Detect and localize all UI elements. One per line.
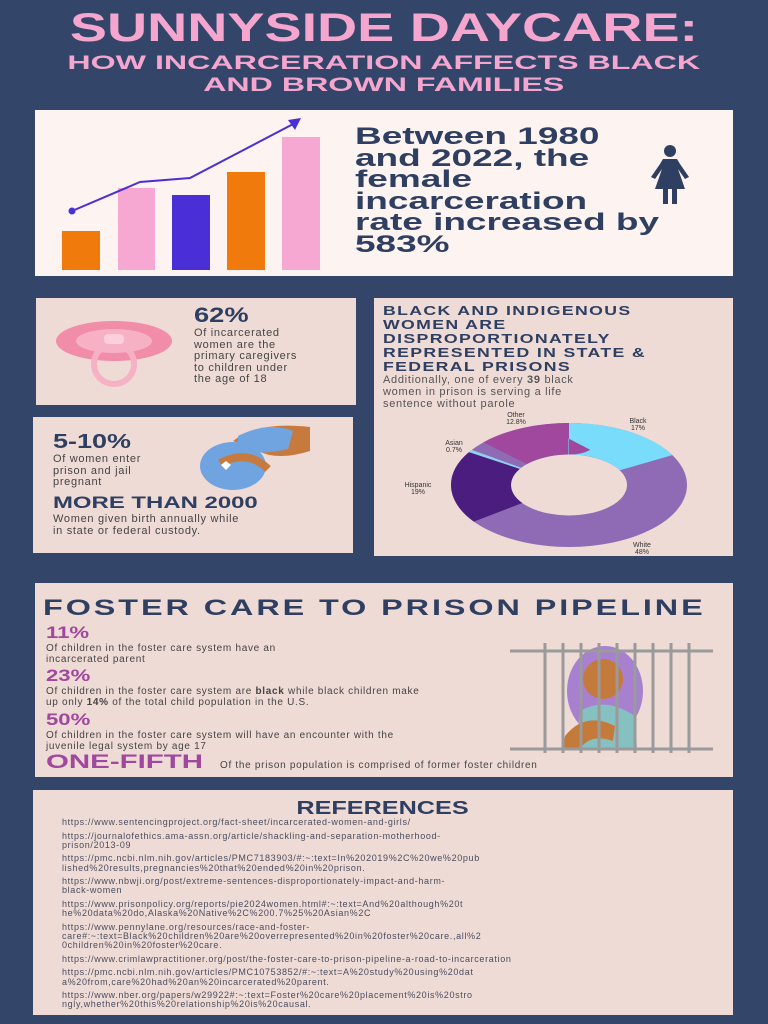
panel: race donut [374, 298, 733, 556]
stat 50% [46, 710, 394, 752]
subtext [383, 374, 574, 410]
reference list: ngly,whether%20this%20relationship%20is%20causal. [62, 999, 311, 1009]
reference list: https://www.prisonpolicy.org/reports/pie2024women.html#:~:text=And%20although%20t [62, 899, 463, 909]
subtitle: AND BROWN FAMILIES [203, 74, 565, 96]
stat 50%: juvenile legal system by age 17 [46, 741, 207, 752]
icon: pacifier [56, 321, 172, 387]
heading: FEDERAL PRISONS [383, 359, 571, 374]
stat 11%: 11% [46, 623, 89, 642]
heading: REPRESENTED IN STATE & [383, 345, 646, 360]
stat one-fifth [46, 752, 538, 773]
stat more than 2000: in state or federal custody. [53, 525, 201, 537]
stat more than 2000 [53, 494, 258, 537]
statistic text: Between 1980 [355, 123, 599, 150]
heading: BLACK AND INDIGENOUS [383, 303, 632, 318]
stat text: to children under [194, 362, 288, 374]
reference list: https://www.nbwji.org/post/extreme-sentences-disproportionately-impact-and-harm- [62, 876, 445, 886]
heading: DISPROPORTIONATELY [383, 331, 611, 346]
subtext: sentence without parole [383, 398, 515, 410]
stat text: the age of 18 [194, 373, 267, 385]
donut chart: 12.8% [506, 419, 526, 426]
stat 11% [46, 623, 276, 665]
stat 5-10%: 5-10% [53, 431, 131, 453]
donut chart: 0.7% [446, 447, 462, 454]
donut chart: 19% [411, 489, 425, 496]
heading: FOSTER CARE TO PRISON PIPELINE [43, 595, 706, 620]
title: SUNNYSIDE DAYCARE: [70, 6, 698, 50]
donut chart [405, 412, 687, 556]
stat text: 62% [194, 304, 249, 327]
panel: foster care pipeline [35, 583, 733, 777]
icon: woman [651, 145, 689, 204]
stat 50%: 50% [46, 710, 90, 729]
stat 5-10%: Of women enter [53, 453, 141, 465]
stat 11%: incarcerated parent [46, 654, 145, 665]
reference list [62, 817, 512, 1009]
statistic text: rate increased by [355, 209, 659, 236]
reference list: prison/2013-09 [62, 840, 131, 850]
heading: WOMEN ARE [383, 317, 507, 332]
statistic text: 583% [355, 230, 450, 258]
stat 5-10%: prison and jail [53, 464, 131, 476]
subtext: women in prison is serving a life [383, 386, 562, 398]
stat 5-10%: pregnant [53, 476, 102, 488]
stat text: women are the [194, 338, 276, 350]
donut chart: Hispanic [405, 482, 432, 489]
donut chart: 48% [635, 549, 649, 556]
reference list: https://www.pennylane.org/resources/race-and-foster- [62, 922, 310, 932]
stat 23%: Of children in the foster care system are black while black children make [46, 686, 419, 697]
subtitle: HOW INCARCERATION AFFECTS BLACK [68, 52, 700, 74]
stat 5-10% [53, 431, 141, 488]
donut chart: Asian [445, 440, 463, 447]
panel: pregnancy [33, 417, 353, 553]
reference list: black-women [62, 885, 122, 895]
reference list: https://journalofethics.ama-assn.org/article/shackling-and-separation-motherhood- [62, 831, 441, 841]
donut chart: Other [507, 412, 525, 419]
bar chart with arrow [62, 118, 320, 270]
subtext: Additionally, one of every 39 black [383, 374, 574, 386]
stat 11%: Of children in the foster care system have an [46, 643, 276, 654]
donut chart: Black [629, 418, 647, 425]
reference list: 0children%20in%20foster%20care. [62, 940, 222, 950]
reference list: https://pmc.ncbi.nlm.nih.gov/articles/PMC7183903/#:~:text=In%202019%2C%20we%20pub [62, 853, 480, 863]
stat more than 2000: Women given birth annually while [53, 513, 239, 525]
heading [383, 303, 646, 374]
stat 23%: 23% [46, 666, 90, 685]
stat one-fifth: ONE-FIFTH [46, 752, 203, 773]
icon: pregnant belly [200, 426, 310, 490]
subtitle [68, 52, 700, 96]
stat more than 2000: MORE THAN 2000 [53, 494, 258, 512]
reference list: https://www.nber.org/papers/w29922#:~:text=Foster%20care%20placement%20is%20stro [62, 990, 473, 1000]
stat one-fifth: Of the prison population is comprised of former foster children [220, 760, 538, 771]
stat text: primary caregivers [194, 350, 297, 362]
reference list: https://www.crimlawpractitioner.org/post/the-foster-care-to-prison-pipeline-a-road-to-incarceration [62, 954, 512, 964]
donut chart: 17% [631, 425, 645, 432]
stat text: Of incarcerated [194, 327, 280, 339]
statistic text: female [355, 166, 472, 193]
stat 23%: up only 14% of the total child population in the U.S. [46, 697, 309, 708]
reference list: care#:~:text=Black%20children%20are%20overrepresented%20in%20foster%20care.,all%2 [62, 931, 481, 941]
reference list: lished%20results,pregnancies%20that%20ended%20in%20prison. [62, 863, 365, 873]
heading: REFERENCES [297, 798, 469, 818]
panel: caregivers 62% [36, 298, 356, 405]
stat 50%: Of children in the foster care system will have an encounter with the [46, 730, 394, 741]
stat text [194, 304, 297, 385]
statistic text: and 2022, the [355, 144, 589, 172]
reference list: https://pmc.ncbi.nlm.nih.gov/articles/PMC10753852/#:~:text=A%20study%20using%20dat [62, 967, 474, 977]
panel: references [33, 790, 733, 1015]
donut chart: White [633, 542, 651, 549]
stat 23% [46, 666, 419, 708]
reference list: a%20from,care%20had%20an%20incarcerated%20parent. [62, 977, 330, 987]
illustration: child behind bars [510, 643, 713, 753]
panel: female incarceration [35, 110, 733, 276]
statistic text: incarceration [355, 188, 587, 214]
reference list: https://www.sentencingproject.org/fact-sheet/incarcerated-women-and-girls/ [62, 817, 411, 827]
reference list: he%20data%20do,Alaska%20Native%2C%200.7%25%20Asian%2C [62, 908, 371, 918]
statistic text [355, 123, 659, 258]
